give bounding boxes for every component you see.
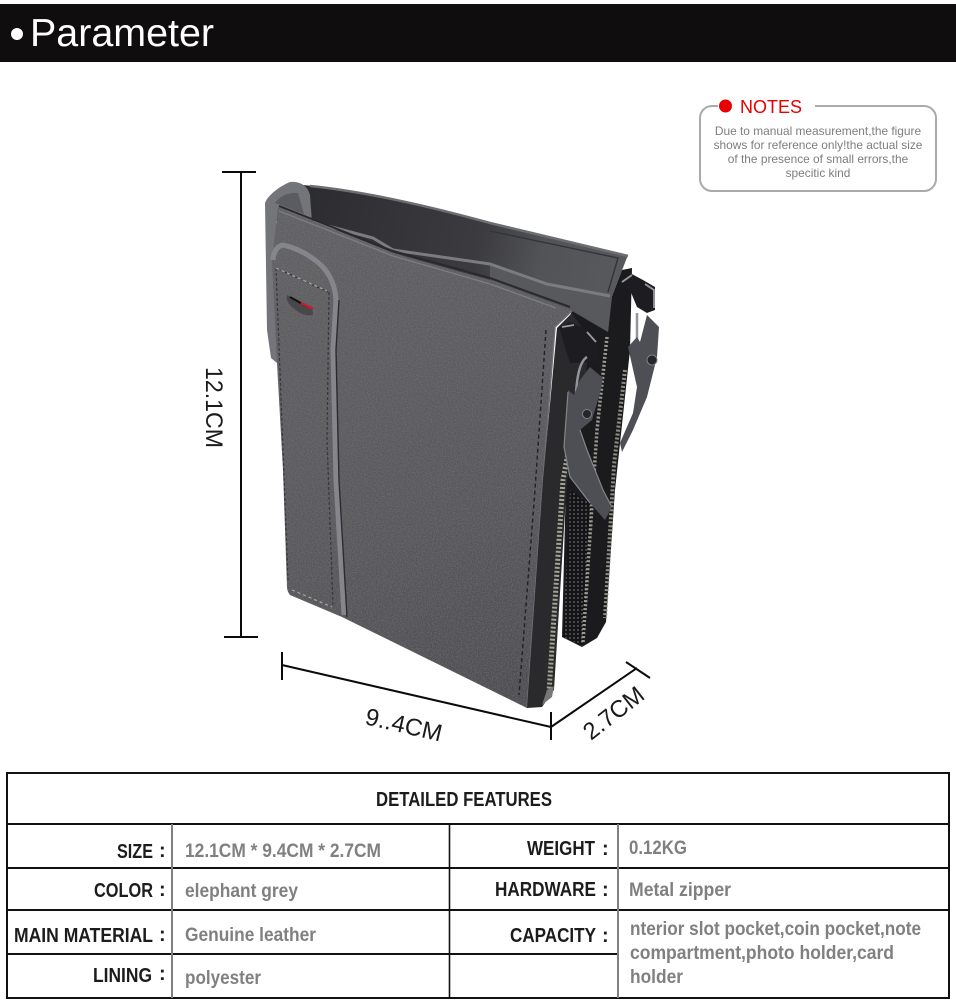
row: color: elephant grey bbox=[185, 880, 298, 902]
row: lining bbox=[93, 963, 261, 989]
row: capacity: CAPACITY bbox=[510, 925, 597, 947]
row: weight: WEIGHT bbox=[527, 838, 595, 860]
wallet interior bbox=[278, 185, 628, 332]
right edge stitching bbox=[519, 330, 546, 695]
front zipper slider bbox=[559, 322, 598, 363]
title: Parameter bbox=[30, 12, 214, 55]
rear pocket bbox=[490, 263, 612, 332]
wallet flap curl bbox=[265, 182, 312, 363]
row: color: COLOR bbox=[94, 880, 153, 902]
notes callout: Due to manual measurement,the figure bbox=[715, 124, 921, 138]
rear zipper slider bbox=[620, 273, 655, 313]
width dimension bbox=[282, 652, 551, 747]
height dimension: 12.1CM bbox=[200, 367, 227, 448]
row: weight: 0.12KG bbox=[629, 837, 687, 859]
row: color: : bbox=[159, 879, 166, 901]
detailed features table bbox=[7, 773, 949, 998]
front puller bbox=[564, 367, 612, 520]
row: size: SIZE bbox=[117, 841, 153, 863]
notes callout: NOTES bbox=[740, 97, 802, 117]
table grid bbox=[7, 773, 949, 998]
row: size bbox=[117, 840, 381, 863]
rear flap rim bbox=[310, 186, 628, 256]
row: size: : bbox=[159, 840, 166, 862]
rear zipper teeth bbox=[605, 370, 625, 618]
depth dimension: 2.7CM bbox=[578, 681, 650, 746]
rear zipper tape bbox=[560, 268, 632, 647]
inner pocket rim bbox=[313, 222, 610, 296]
row: lining: : bbox=[159, 963, 166, 985]
notes callout: specitic kind bbox=[786, 166, 850, 180]
row: lining: polyester bbox=[185, 967, 261, 989]
row: capacity: compartment,photo holder,card bbox=[630, 942, 894, 964]
row: lining: LINING bbox=[93, 965, 152, 987]
row: hardware: : bbox=[602, 879, 609, 901]
front zipper tape bbox=[527, 313, 590, 708]
row: capacity bbox=[510, 918, 921, 988]
front zipper stop bbox=[542, 686, 554, 705]
row: weight: : bbox=[602, 838, 609, 860]
height dimension bbox=[200, 172, 258, 637]
row: hardware: HARDWARE bbox=[495, 879, 596, 901]
width dimension: 9..4CM bbox=[363, 704, 445, 747]
row: capacity: holder bbox=[630, 966, 683, 988]
notes callout bbox=[700, 97, 936, 191]
rear flap stitching bbox=[490, 231, 618, 292]
row: size: 12.1CM * 9.4CM * 2.7CM bbox=[185, 840, 381, 862]
row: color bbox=[94, 879, 298, 902]
front zipper teeth bbox=[549, 420, 574, 692]
row: capacity: : bbox=[602, 925, 609, 947]
card slot bbox=[287, 295, 313, 315]
strap trim bbox=[273, 245, 344, 615]
notes callout: shows for reference only!the actual size bbox=[714, 138, 923, 152]
front puller edge bbox=[564, 392, 612, 507]
header bar bbox=[0, 4, 956, 62]
row: main material: : bbox=[159, 924, 166, 946]
depth dimension bbox=[551, 662, 650, 746]
middle zipper teeth bbox=[583, 337, 607, 642]
rear puller bbox=[620, 315, 659, 452]
top edge stitching bbox=[279, 206, 570, 307]
row: main material: Genuine leather bbox=[185, 924, 316, 946]
strap stitching bbox=[276, 268, 333, 606]
strap shadow bbox=[336, 300, 347, 617]
wallet photo bbox=[265, 182, 659, 708]
front leather panel bbox=[272, 207, 572, 708]
row: hardware bbox=[495, 879, 731, 901]
row: main material: MAIN MATERIAL bbox=[14, 925, 153, 947]
notes callout: of the presence of small errors,the bbox=[728, 152, 909, 166]
row: capacity: nterior slot pocket,coin pocket,note bbox=[630, 918, 921, 940]
right edge highlight bbox=[527, 311, 572, 708]
row: hardware: Metal zipper bbox=[629, 879, 731, 901]
table heading: DETAILED FEATURES bbox=[376, 789, 552, 811]
row: main material bbox=[14, 924, 316, 947]
rear mesh bbox=[563, 490, 592, 646]
row: weight bbox=[527, 837, 687, 860]
